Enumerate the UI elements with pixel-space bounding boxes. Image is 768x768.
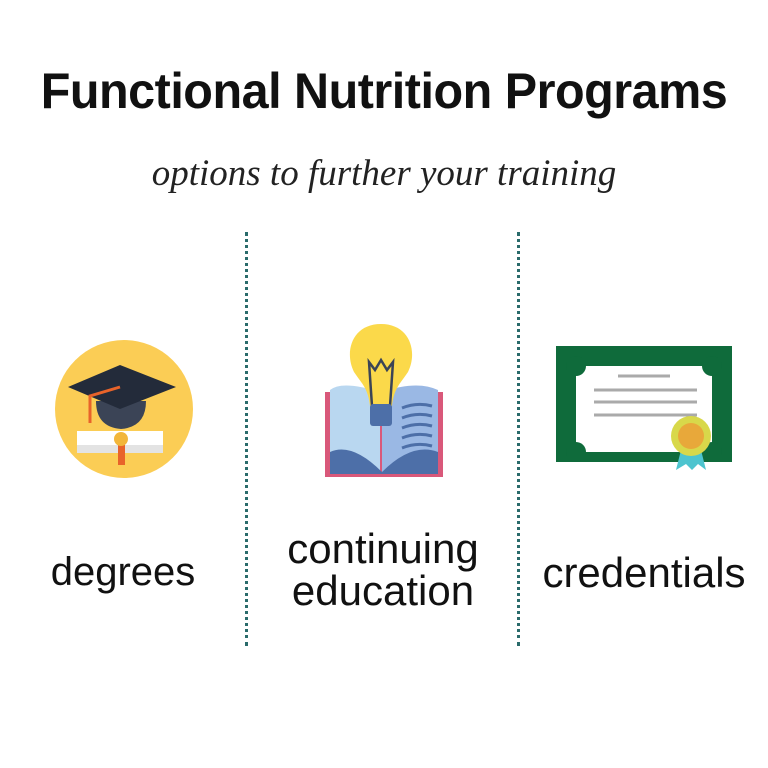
title: Functional Nutrition Programs: [41, 63, 727, 119]
label: degrees: degrees: [51, 550, 195, 594]
icon: book with lightbulb: [325, 324, 443, 477]
subtitle: options to further your training: [152, 153, 616, 194]
icon: certificate: [556, 346, 732, 470]
label: continuing education: education: [292, 567, 474, 614]
label: continuing education: continuing: [287, 525, 479, 572]
divider left: [245, 232, 248, 646]
divider right: [517, 232, 520, 646]
label: credentials: credentials: [542, 549, 746, 596]
icon: graduation cap: [55, 340, 193, 478]
label: continuing education: [287, 525, 479, 614]
